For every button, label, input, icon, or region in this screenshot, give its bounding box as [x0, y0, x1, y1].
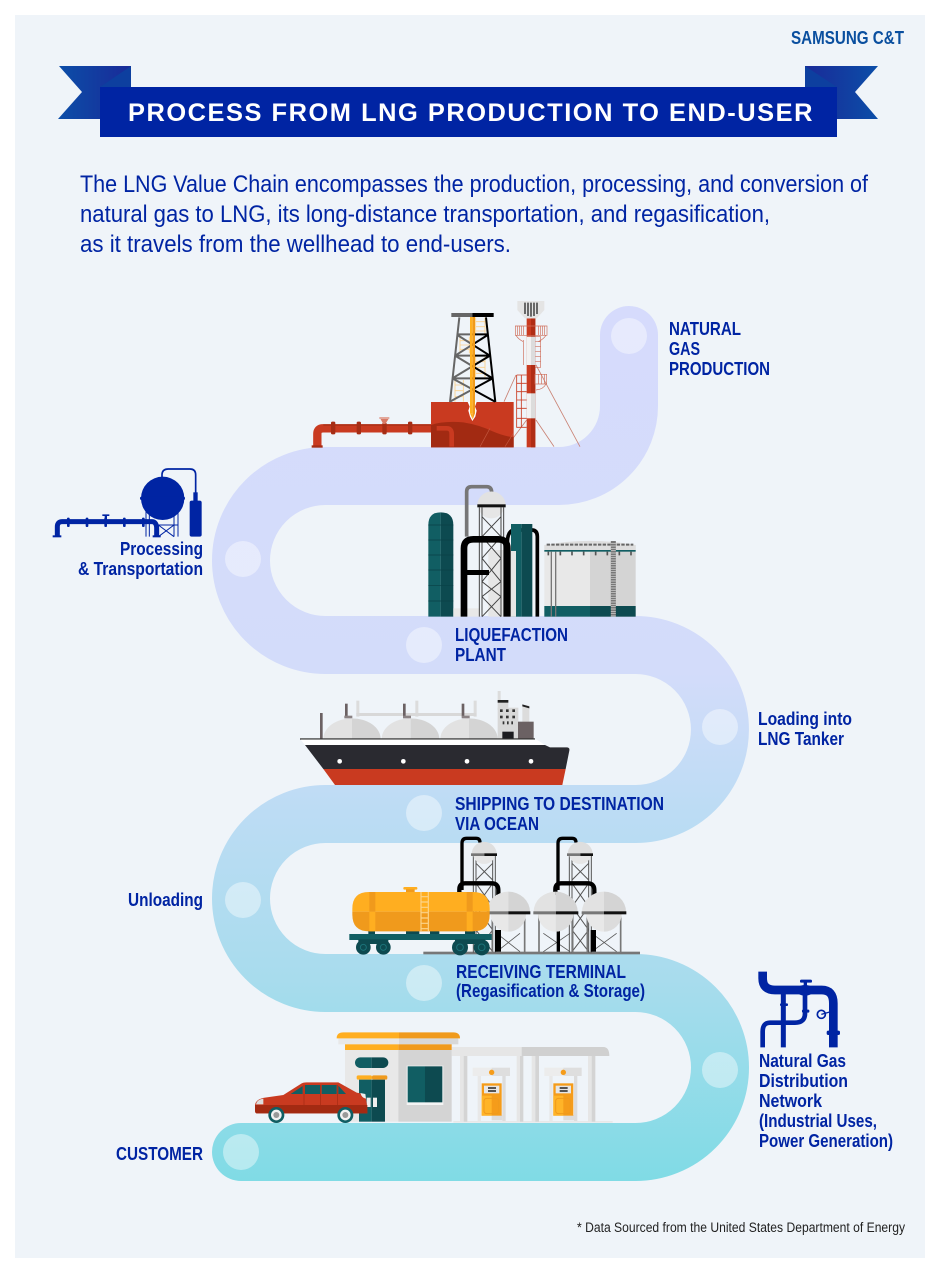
icon: liquefaction plant	[428, 487, 636, 617]
winding road	[241, 335, 720, 1152]
title: PROCESS FROM LNG PRODUCTION TO END-USER	[128, 99, 814, 127]
intro text: as it travels from the wellhead to end-users.	[80, 231, 511, 258]
label: shipping to destination: VIA OCEAN	[455, 814, 539, 834]
label: processing and transportation: & Transportation	[78, 559, 203, 579]
label: natural gas distribution network	[759, 1051, 893, 1151]
label: loading into LNG tanker	[758, 709, 852, 749]
label: natural gas production: GAS	[669, 339, 700, 359]
label: natural gas production: PRODUCTION	[669, 359, 770, 379]
icon: gas station and car	[255, 1032, 613, 1123]
label: natural gas distribution network: Natural Gas	[759, 1051, 846, 1071]
title ribbon	[58, 66, 878, 137]
label: natural gas production	[669, 319, 770, 379]
label: receiving terminal: RECEIVING TERMINAL	[456, 962, 626, 982]
brand logo: SAMSUNG C&T	[791, 28, 904, 48]
label: liquefaction plant: PLANT	[455, 645, 506, 665]
road stop markers	[223, 318, 738, 1170]
label: natural gas distribution network: Power Generation)	[759, 1131, 893, 1151]
label: processing and transportation	[78, 539, 203, 579]
footnote: * Data Sourced from the United States Department of Energy	[577, 1220, 905, 1235]
label: loading into LNG tanker: Loading into	[758, 709, 852, 729]
label: liquefaction plant: LIQUEFACTION	[455, 625, 568, 645]
label: receiving terminal: (Regasification & Storage)	[456, 981, 645, 1001]
label: shipping to destination: SHIPPING TO DESTINATION	[455, 794, 664, 814]
label: receiving terminal	[456, 962, 645, 1001]
label: natural gas distribution network: Network	[759, 1091, 823, 1111]
label: loading into LNG tanker: LNG Tanker	[758, 729, 844, 749]
label: shipping to destination	[455, 794, 664, 834]
label: unloading: Unloading	[128, 890, 203, 910]
intro text: The LNG Value Chain encompasses the production, processing, and conversion of	[80, 171, 868, 198]
label: customer: CUSTOMER	[116, 1144, 203, 1164]
label: natural gas production: NATURAL	[669, 319, 741, 339]
label: processing and transportation: Processing	[120, 539, 203, 559]
intro text	[80, 171, 868, 258]
label: liquefaction plant	[455, 625, 568, 665]
intro text: natural gas to LNG, its long-distance transportation, and regasification,	[80, 201, 770, 228]
label: natural gas distribution network: Distribution	[759, 1071, 848, 1091]
icon: processing sphere and pipeline	[53, 469, 202, 537]
icon: receiving terminal and rail tanker	[349, 838, 640, 955]
icon: natural gas rig and flare	[312, 301, 580, 448]
icon: LNG tanker ship	[300, 691, 569, 785]
label: natural gas distribution network: (Industrial Uses,	[759, 1111, 877, 1131]
icon: pipeline distribution network	[763, 972, 840, 1047]
